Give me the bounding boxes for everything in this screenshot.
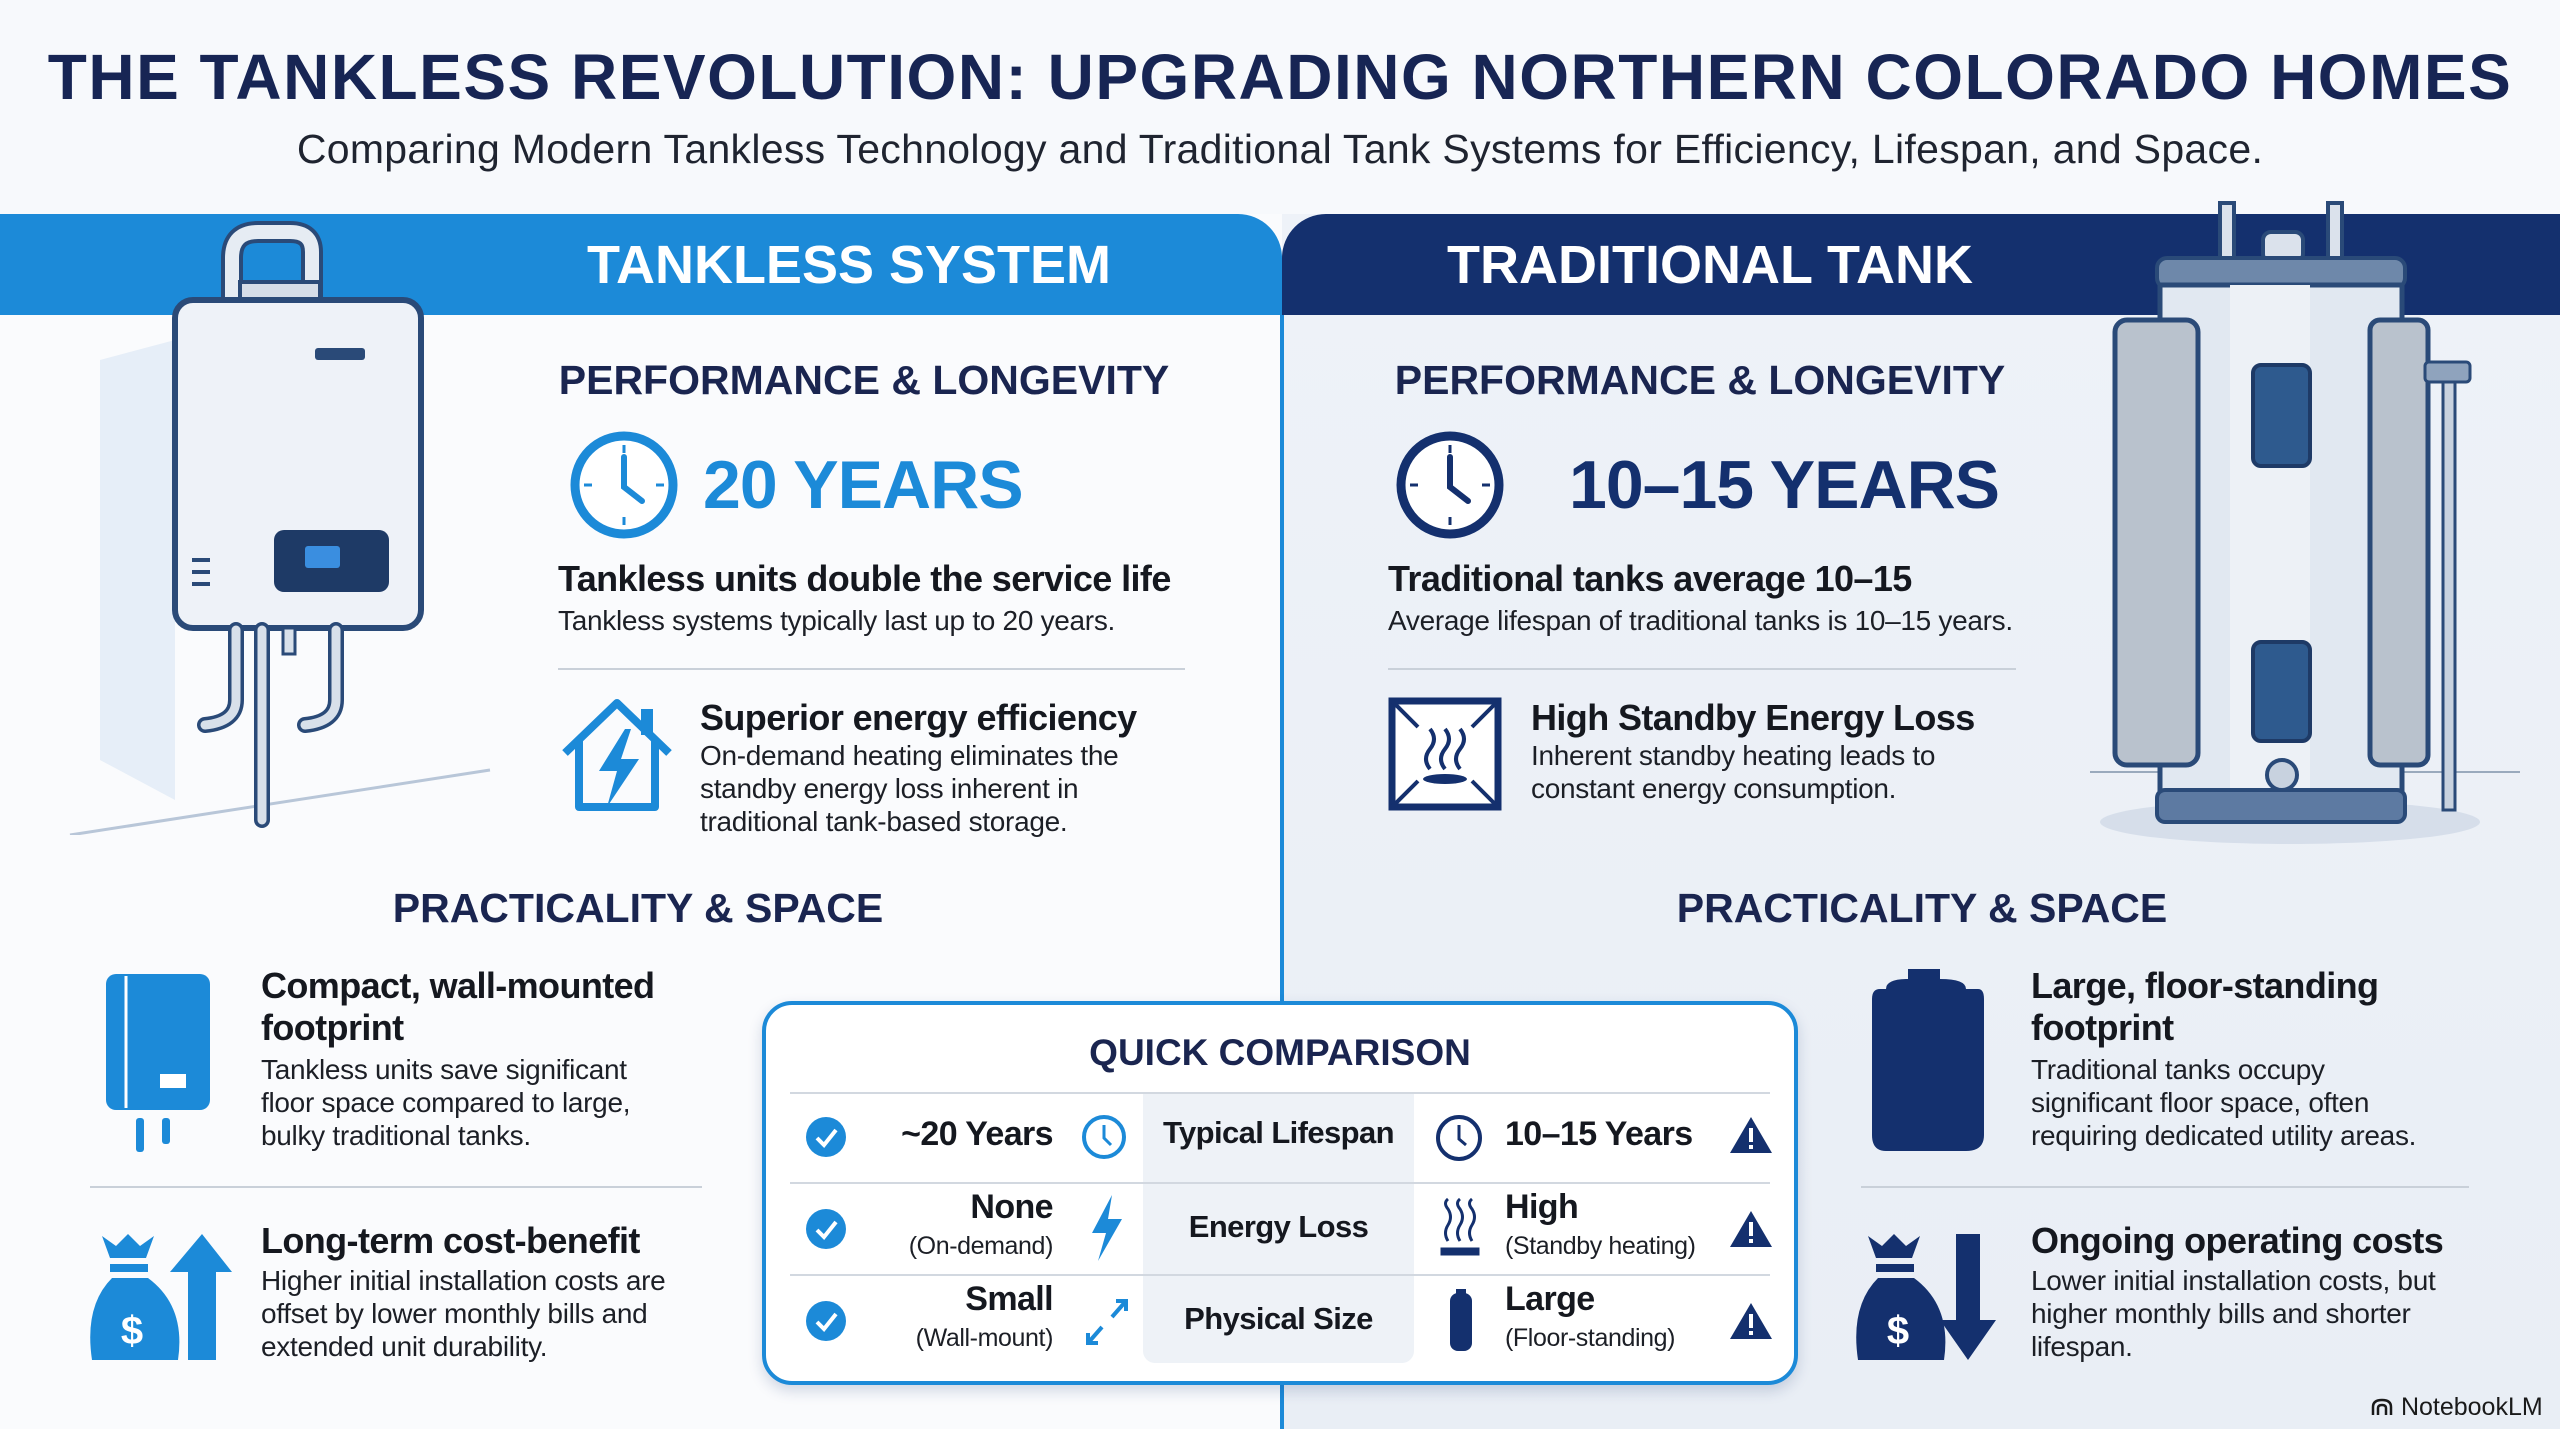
row: lifespan: 10–15 Years [1505,1115,1693,1153]
text: high standby energy loss [1531,697,1975,804]
text: traditional lifespan: Traditional tanks average 10–15 [1388,558,1912,599]
icon: money bag up [90,1234,232,1360]
text: long-term cost-benefit: offset by lower monthly bills and [261,1298,647,1329]
row: physical size: Small [965,1280,1053,1318]
text: large floor-standing [2031,965,2416,1151]
text: compact: Tankless units save significant [261,1054,627,1085]
text: large floor-standing: footprint [2031,1007,2174,1048]
header band: traditional [1282,214,2560,315]
text: superior energy efficiency: standby energy loss inherent in [700,773,1078,804]
icon: tank silhouette [1872,969,1984,1151]
row: physical size: Large [1505,1280,1595,1318]
icon: clock navy [1396,432,1504,538]
text: large floor-standing: significant floor space, often [2031,1087,2369,1118]
row: physical size: Physical Size [1184,1301,1373,1336]
right panel background [1282,214,2560,1429]
stat: 20 years: 20 YEARS [703,447,1023,523]
heading: practicality right: PRACTICALITY & SPACE [1677,885,2167,931]
row: physical size: (Floor-standing) [1505,1324,1675,1352]
text: compact: footprint [261,1007,404,1048]
text: tankless service life: Tankless systems typically last up to 20 years. [558,605,1115,636]
row: energy loss [806,1188,1772,1261]
text: superior energy efficiency: traditional tank-based storage. [700,806,1067,837]
icon: money bag down: $ [1887,1309,1909,1353]
text: superior energy efficiency [700,697,1137,837]
text: tankless service life: Tankless units double the service life [558,558,1171,599]
title: THE TANKLESS REVOLUTION: UPGRADING NORTHERN COLORADO HOMES [48,41,2512,113]
text: compact [261,965,654,1151]
text: large floor-standing: requiring dedicated utility areas. [2031,1120,2416,1151]
icon: money bag up: $ [121,1309,143,1353]
text: tankless service life [558,558,1171,636]
text: high standby energy loss: Inherent standby heating leads to [1531,740,1935,771]
panel: quick comparison [762,1001,1798,1385]
heading: tankless system: TANKLESS SYSTEM [587,235,1111,295]
row: energy loss: (Standby heating) [1505,1232,1696,1260]
text: superior energy efficiency: Superior energy efficiency [700,697,1137,738]
row: energy loss: Energy Loss [1189,1209,1368,1244]
text: large floor-standing: Traditional tanks occupy [2031,1054,2325,1085]
text: long-term cost-benefit: Long-term cost-benefit [261,1220,640,1261]
logo: NotebookLM: NotebookLM [2401,1393,2543,1421]
icon: wall unit [106,974,210,1152]
text: long-term cost-benefit: extended unit durability. [261,1331,547,1362]
text: compact: Compact, wall-mounted [261,965,654,1006]
text: large floor-standing: Large, floor-standing [2031,965,2378,1006]
icon: house lightning [562,699,672,811]
subtitle: Comparing Modern Tankless Technology and Traditional Tank Systems for Efficiency, Lifespan, and Space. [297,126,2263,172]
heading: practicality left: PRACTICALITY & SPACE [393,885,883,931]
text: compact: bulky traditional tanks. [261,1120,531,1151]
stat: 10-15 years: 10–15 YEARS [1569,447,1999,523]
row: energy loss: (On-demand) [909,1232,1053,1260]
text: compact: floor space compared to large, [261,1087,630,1118]
icon: standby heat box [1388,698,1502,810]
left panel background [0,214,1282,1429]
illustration: tankless heater [70,221,490,835]
icon: money bag down [1856,1234,1996,1360]
heading: performance & longevity (left): PERFORMANCE & LONGEVITY [559,357,1169,403]
text: ongoing operating costs [2031,1220,2443,1362]
vertical divider [1280,315,1284,1429]
header band: tankless [0,214,1282,315]
icon: clock blue [570,432,678,538]
text: long-term cost-benefit [261,1220,665,1362]
row: lifespan: ~20 Years [901,1115,1053,1153]
comparison title: QUICK COMPARISON [1089,1032,1471,1073]
text: high standby energy loss: constant energy consumption. [1531,773,1896,804]
text: long-term cost-benefit: Higher initial installation costs are [261,1265,665,1296]
heading: performance & longevity (right): PERFORMANCE & LONGEVITY [1395,357,2005,403]
heading: traditional tank: TRADITIONAL TANK [1447,235,1973,295]
illustration: traditional tank [2090,201,2520,844]
text: high standby energy loss: High Standby Energy Loss [1531,697,1975,738]
row: lifespan: Typical Lifespan [1163,1115,1394,1150]
text: traditional lifespan [1388,558,2013,636]
text: ongoing operating costs: Lower initial installation costs, but [2031,1265,2435,1296]
text: superior energy efficiency: On-demand heating eliminates the [700,740,1118,771]
row: physical size [806,1280,1772,1352]
row: energy loss: High [1505,1188,1578,1226]
row: lifespan [806,1115,1772,1161]
row: energy loss: None [970,1188,1053,1226]
text: ongoing operating costs: lifespan. [2031,1331,2133,1362]
row: physical size: (Wall-mount) [916,1324,1053,1352]
text: traditional lifespan: Average lifespan of traditional tanks is 10–15 years. [1388,605,2013,636]
text: ongoing operating costs: Ongoing operating costs [2031,1220,2443,1261]
text: ongoing operating costs: higher monthly bills and shorter [2031,1298,2410,1329]
